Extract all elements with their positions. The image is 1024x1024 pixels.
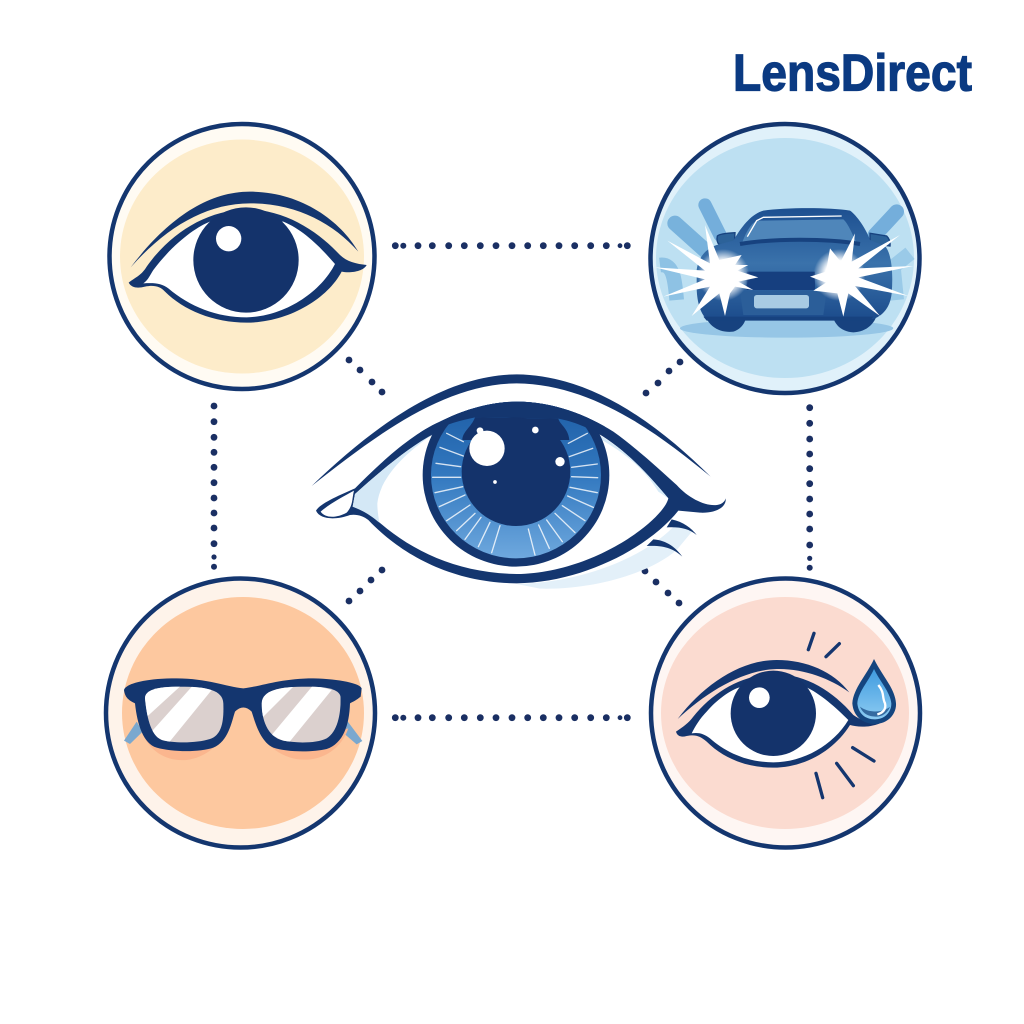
panel: top-right headlight glare circle — [650, 124, 920, 393]
dotted connector: diagonal bottom-right — [642, 568, 682, 606]
dotted connector: top — [392, 242, 631, 249]
tear duct — [321, 491, 354, 517]
right lashes — [667, 519, 697, 535]
dotted connector: right — [806, 404, 813, 571]
panel: top-left eye circle — [110, 124, 374, 389]
upper brow crescent — [312, 374, 711, 486]
icon: watery eye with tear — [676, 633, 896, 798]
iris — [420, 383, 609, 567]
dotted connector: left — [211, 403, 217, 570]
logo: LensDirect: LensDirect — [733, 44, 972, 102]
dotted connector: diagonal top-right — [643, 359, 683, 396]
panel: bottom-right watery eye circle — [651, 578, 920, 848]
icon: glasses — [124, 678, 362, 760]
icon: car with glaring headlights — [655, 205, 913, 338]
dotted connector: diagonal top-left — [346, 357, 385, 395]
corner shading — [353, 434, 433, 523]
eye white — [353, 433, 668, 574]
shadow under lower lid — [517, 523, 693, 589]
central eye — [312, 374, 726, 589]
panel: bottom-left glasses circle — [106, 578, 375, 848]
icon: open eye — [129, 192, 367, 323]
dotted connector: bottom — [392, 714, 631, 721]
eye outline — [316, 402, 726, 583]
dotted connector: diagonal bottom-left — [346, 567, 385, 604]
